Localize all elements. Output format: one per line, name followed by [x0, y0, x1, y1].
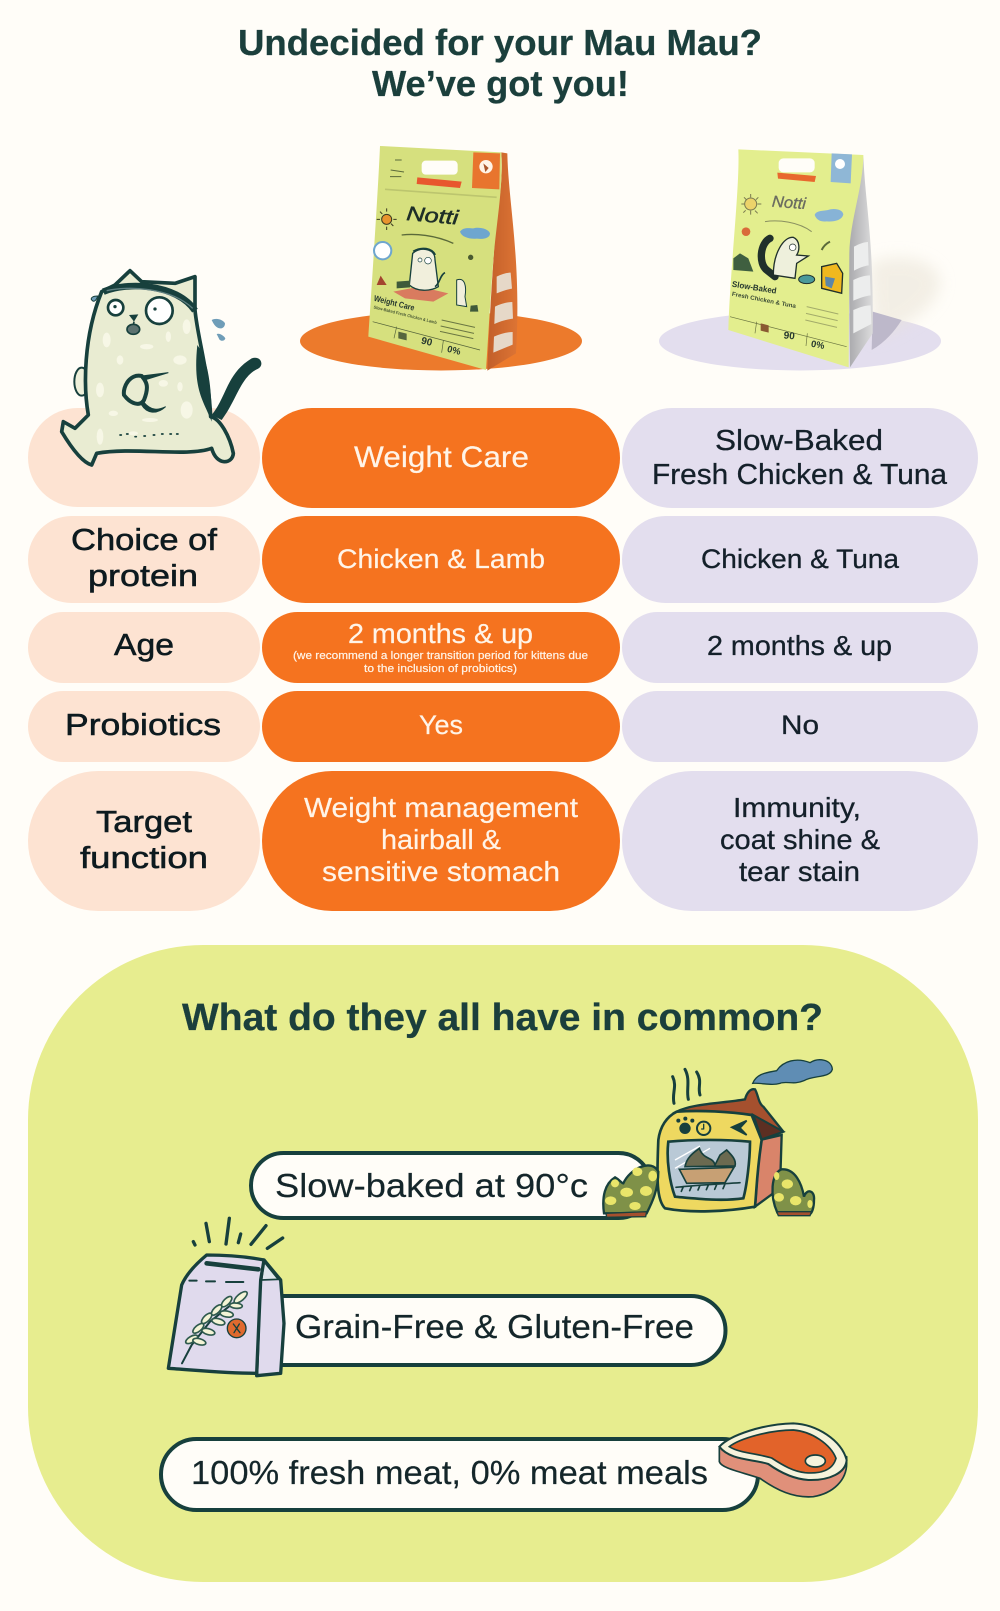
row: age: to the inclusion of probiotics)	[364, 663, 517, 675]
icon: oven with mitts	[603, 1060, 832, 1217]
product bag: Slow-Baked Chicken and Tuna: Notti	[771, 194, 807, 213]
pill: fresh meat	[161, 1439, 758, 1510]
product bag: Slow-Baked Chicken and Tuna: 0%	[810, 339, 826, 351]
orange ellipse platform	[300, 312, 582, 370]
product bag: Weight Care: Weight Care	[373, 293, 416, 313]
row: target function: Immunity,	[733, 792, 861, 823]
row: age: Age	[114, 627, 174, 662]
product bag: Weight Care	[368, 146, 517, 371]
product bag: Slow-Baked Chicken and Tuna: 90	[783, 330, 796, 343]
heading: what they have in common: What do they all have in common?	[182, 997, 823, 1039]
icon: running cat mascot	[62, 271, 261, 465]
pill: slow-baked	[251, 1153, 651, 1218]
row: product names: Fresh Chicken & Tuna	[652, 459, 948, 491]
panel: common features	[28, 945, 978, 1582]
row: target function: coat shine &	[720, 824, 880, 855]
row: product names	[28, 408, 978, 508]
purple ellipse platform	[659, 312, 941, 370]
row: age	[28, 612, 978, 683]
icon: grain-free bag	[168, 1218, 284, 1376]
row: choice of protein: Chicken & Lamb	[337, 544, 545, 574]
row: target function: hairball &	[381, 824, 501, 855]
row: probiotics: Yes	[419, 710, 463, 740]
row: target function	[28, 771, 978, 911]
pill: slow-baked: Slow-baked at 90°c	[275, 1167, 588, 1204]
product bag: Weight Care: Notti	[406, 203, 460, 230]
product bag: Weight Care: 90	[420, 336, 434, 349]
pill: grain-free	[260, 1296, 726, 1365]
pill: grain-free: Grain-Free & Gluten-Free	[295, 1308, 694, 1345]
row: probiotics: Probiotics	[65, 707, 221, 742]
row: target function: function	[80, 840, 208, 875]
row: target function: Weight management	[304, 792, 578, 823]
row: product names: Weight Care	[354, 441, 529, 474]
row: probiotics: No	[781, 710, 819, 740]
product bag: Weight Care: 0%	[446, 344, 462, 357]
row: choice of protein	[28, 516, 978, 603]
row: target function: tear stain	[739, 856, 860, 887]
product bag: Slow-Baked Chicken and Tuna: Fresh Chicken & Tuna	[731, 292, 797, 310]
pill: fresh meat: 100% fresh meat, 0% meat meals	[191, 1454, 708, 1491]
product bag: Slow-Baked Chicken and Tuna	[728, 149, 940, 367]
icon: steak	[719, 1423, 847, 1497]
row: product names: Slow-Baked	[715, 425, 883, 457]
title: We’ve got you!	[372, 63, 629, 104]
row: target function: sensitive stomach	[322, 856, 560, 887]
comparison table	[28, 408, 978, 911]
product bag: Slow-Baked Chicken and Tuna: Slow-Baked	[731, 279, 777, 296]
row: age: 2 months & up	[707, 630, 892, 661]
row: choice of protein: Chicken & Tuna	[701, 544, 900, 574]
product bag: Weight Care: Slow-Baked Fresh Chicken & Lamb	[373, 304, 438, 325]
row: choice of protein: Choice of	[71, 522, 217, 557]
row: age: (we recommend a longer transition period for kittens due	[293, 650, 588, 662]
row: target function: Target	[96, 804, 192, 839]
row: age: 2 months & up	[348, 618, 533, 649]
title: Undecided for your Mau Mau?	[238, 22, 762, 63]
row: probiotics	[28, 691, 978, 762]
row: choice of protein: protein	[88, 558, 198, 593]
title	[238, 22, 762, 104]
